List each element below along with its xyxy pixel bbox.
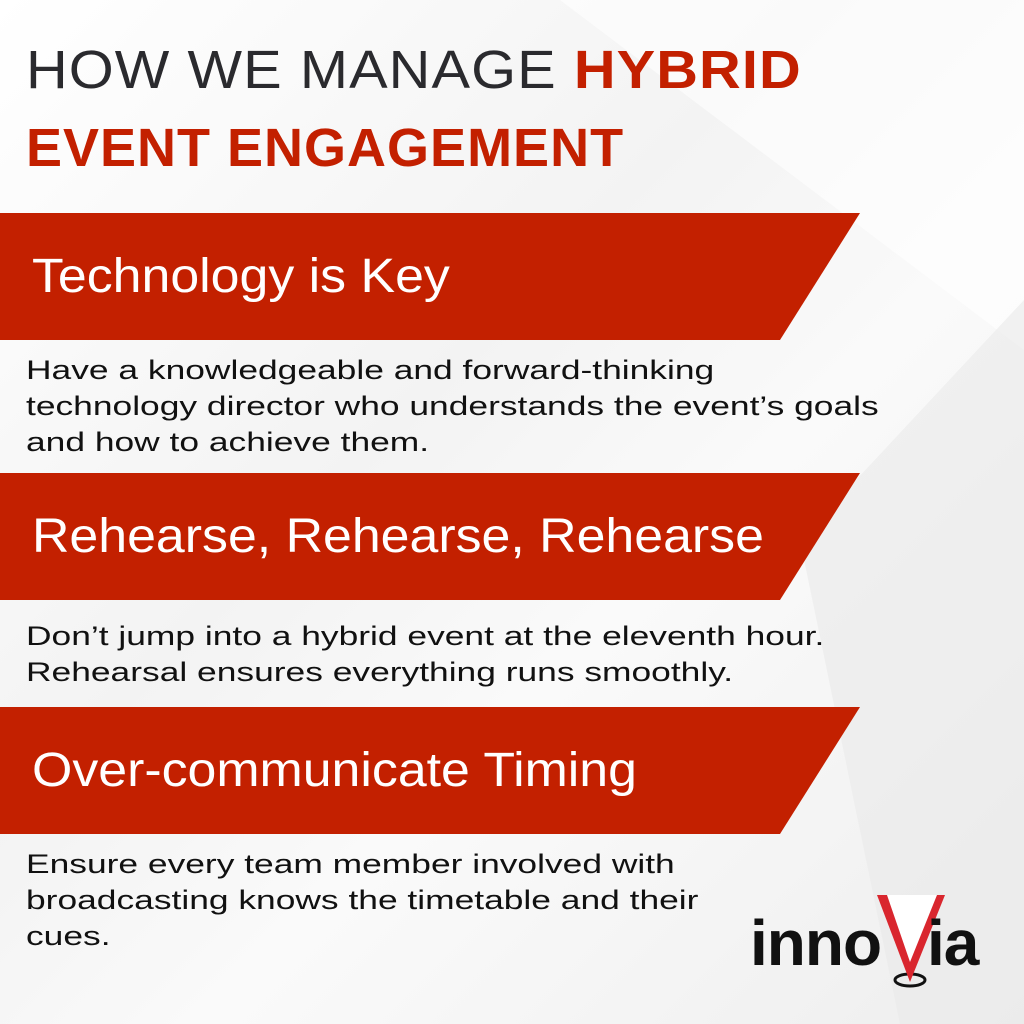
- banner: Technology is Key: [0, 213, 860, 340]
- text: technology: and how to achieve them.: [26, 427, 429, 457]
- text: rehearse: [26, 621, 824, 687]
- text: timing: Ensure every team member involved with: [26, 849, 675, 879]
- banner: Timing: Over-communicate Timing: [32, 744, 637, 797]
- logo: innovia: ia: [927, 907, 978, 979]
- text: technology: technology director who understands the event’s goals: [26, 391, 879, 421]
- title: HOW WE MANAGE HYBRID: [26, 40, 802, 100]
- text: technology: Have a knowledgeable and forward-thinking: [26, 355, 714, 385]
- text: timing: [26, 849, 698, 951]
- text: timing: cues.: [26, 921, 111, 951]
- title: EVENT ENGAGEMENT: [26, 118, 624, 178]
- text: rehearse: Rehearsal ensures everything runs smoothly.: [26, 657, 733, 687]
- text: rehearse: Don’t jump into a hybrid event at the eleventh hour.: [26, 621, 824, 651]
- logo: innovia: [750, 895, 980, 988]
- banner: Rehearse: Rehearse, Rehearse, Rehearse: [32, 510, 764, 563]
- banner: Rehearse: [0, 473, 860, 600]
- text: technology: [26, 355, 879, 457]
- text: timing: broadcasting knows the timetable and their: [26, 885, 698, 915]
- banner: Timing: [0, 707, 860, 834]
- banner: Technology is Key: Technology is Key: [32, 250, 450, 303]
- logo: innovia: inno: [750, 907, 881, 979]
- title: [26, 40, 802, 178]
